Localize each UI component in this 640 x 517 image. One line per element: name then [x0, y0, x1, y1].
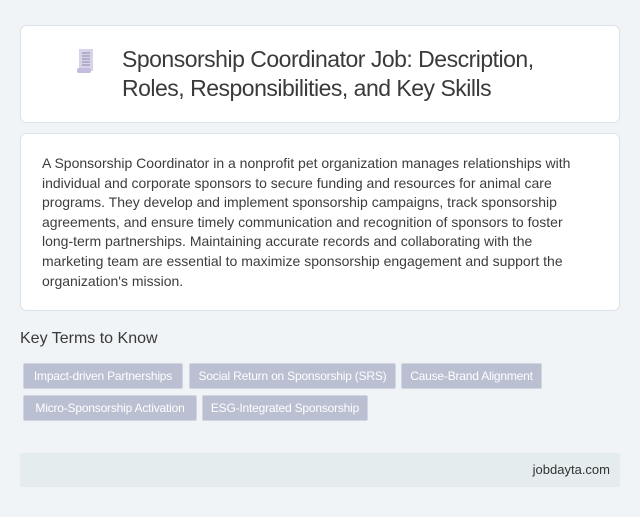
key terms tags: Micro-Sponsorship Activation — [35, 401, 185, 415]
key terms tags: ESG-Integrated Sponsorship — [211, 401, 359, 415]
title — [122, 46, 534, 101]
icon: document — [77, 49, 93, 73]
title: Roles, Responsibilities, and Key Skills — [122, 75, 491, 101]
key terms heading: Key Terms to Know — [20, 330, 158, 347]
description card — [20, 133, 620, 311]
key terms tags: Social Return on Sponsorship (SRS) — [199, 369, 386, 383]
key terms tags: Impact-driven Partnerships — [34, 369, 172, 383]
description text: A Sponsorship Coordinator in a nonprofit pet organization manages relationships with individual and corporate sponsors to secure funding and resources for animal care programs. They develop and implement sponsorship campaigns, track sponsorship agreements, and ensure timely communication and recognition of sponsors to foster long-term partnerships. Maintaining accurate records and collaborating with the marketing team are essential to maximize sponsorship engagement and support the organization's mission. — [42, 155, 570, 289]
footer text: jobdayta.com — [533, 462, 610, 477]
key terms tags: Cause-Brand Alignment — [410, 369, 533, 383]
title: Sponsorship Coordinator Job: Description, — [122, 46, 534, 72]
footer — [20, 453, 620, 487]
header card — [20, 25, 620, 123]
key terms tags — [23, 363, 542, 421]
